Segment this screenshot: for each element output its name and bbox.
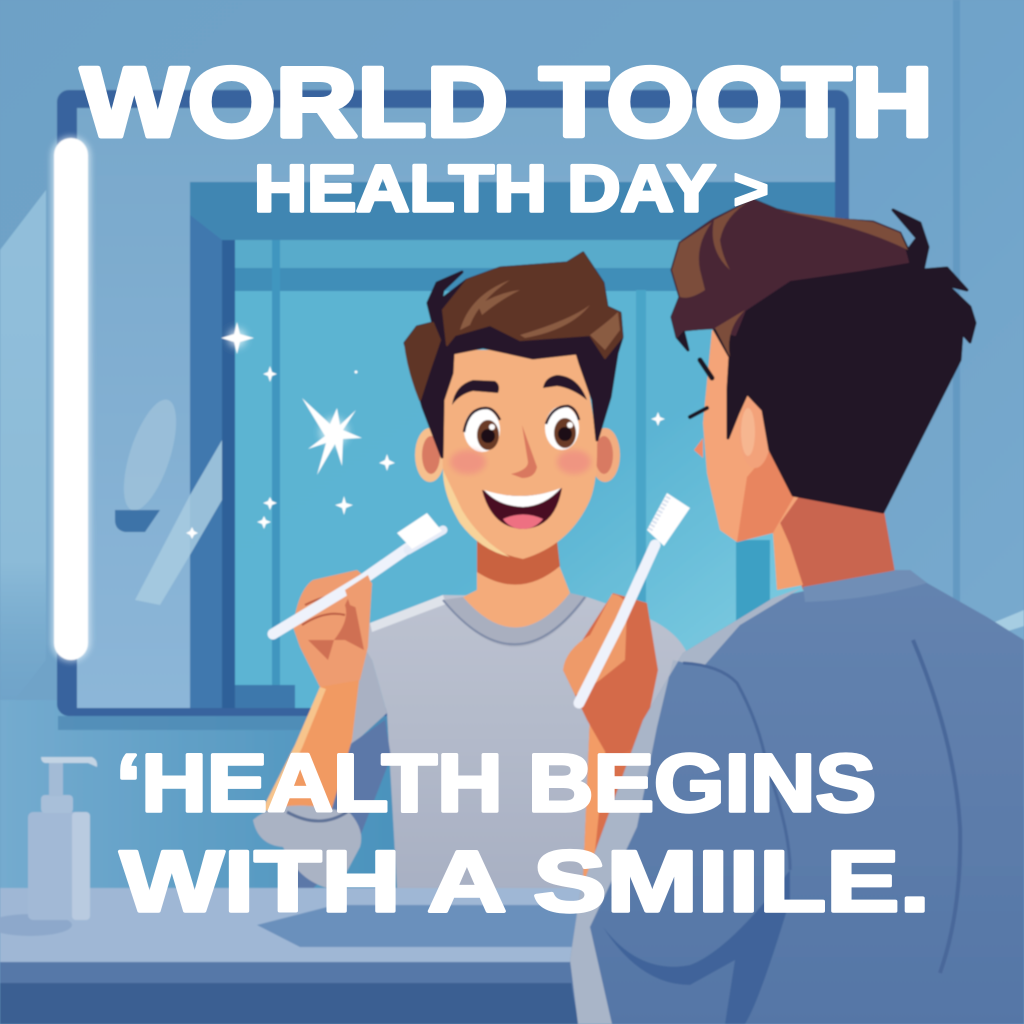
reflected room bbox=[190, 182, 835, 708]
mirror glare bbox=[113, 394, 222, 605]
mirror glass bbox=[77, 108, 835, 708]
neck bbox=[777, 490, 895, 590]
finger lines bbox=[302, 595, 345, 625]
slogan line 2: WITH A SMIILE. bbox=[120, 834, 930, 930]
shirt bbox=[570, 570, 1024, 1024]
upper sleeve bbox=[335, 640, 387, 745]
back crease bbox=[913, 640, 960, 973]
wall glare bbox=[0, 190, 46, 720]
face shadow bbox=[737, 450, 795, 542]
left brow bbox=[452, 380, 499, 405]
bathroom counter bbox=[0, 888, 640, 1024]
sleeve cuff bbox=[253, 805, 361, 890]
forearm right bbox=[583, 715, 645, 880]
slogan line 1: ‘HEALTH BEGINS bbox=[116, 738, 876, 829]
hair highlight bbox=[672, 201, 908, 357]
big sparkle bbox=[302, 398, 362, 475]
light bar bbox=[51, 136, 91, 662]
wall panel line bbox=[953, 0, 960, 640]
right cheek bbox=[557, 450, 591, 474]
tongue bbox=[503, 514, 543, 529]
face bbox=[441, 350, 597, 559]
eyebrow bbox=[700, 360, 712, 378]
sleeve seam bbox=[683, 663, 790, 870]
inner ear bbox=[741, 408, 755, 456]
nose bbox=[511, 425, 537, 478]
reflected man bbox=[253, 253, 690, 897]
ear bbox=[739, 398, 771, 468]
shoulder highlight bbox=[370, 595, 446, 632]
hair bbox=[405, 253, 622, 457]
collar bbox=[803, 570, 927, 602]
sleeve shadow bbox=[285, 720, 391, 897]
neck light strip bbox=[772, 518, 803, 590]
forearm light edge bbox=[583, 715, 606, 880]
finger over brush bbox=[345, 575, 372, 610]
left hand bbox=[293, 570, 372, 687]
wall glare right bbox=[995, 610, 1024, 632]
hand back bbox=[563, 593, 658, 760]
small sparkle glow bbox=[228, 329, 246, 347]
teeth bbox=[484, 488, 561, 507]
cheeks bbox=[450, 450, 486, 474]
subtitle: HEALTH DAY bbox=[254, 151, 716, 225]
shirt grey rim bbox=[570, 587, 803, 1024]
lower wall below mirror bbox=[0, 700, 400, 900]
mirror frame bbox=[57, 90, 849, 716]
lower arm shading bbox=[603, 870, 790, 1024]
hair highlights bbox=[460, 280, 620, 350]
cuff fold bbox=[287, 812, 347, 821]
fingers bbox=[563, 594, 627, 695]
back-view man bbox=[570, 200, 1024, 1024]
right hand in mirror bbox=[563, 493, 690, 880]
shelf bbox=[115, 510, 160, 532]
dispenser shadow bbox=[0, 914, 72, 936]
sparkles bbox=[186, 322, 665, 539]
ears bbox=[415, 428, 620, 482]
mouth bbox=[482, 488, 562, 529]
neck shadow bbox=[477, 540, 560, 585]
nose tip bbox=[694, 438, 703, 458]
right toothbrush bbox=[579, 493, 690, 703]
mirror frame shadow bbox=[58, 716, 388, 730]
subtitle: > bbox=[733, 157, 769, 222]
eyelash bbox=[690, 408, 707, 417]
face bbox=[703, 330, 800, 542]
sweater body bbox=[363, 595, 690, 890]
forearm bbox=[262, 673, 360, 815]
right brow bbox=[543, 375, 587, 400]
collar stitch bbox=[443, 597, 585, 644]
small sparkles bbox=[221, 322, 254, 354]
sweater collar bbox=[443, 593, 587, 647]
big sparkle glow bbox=[320, 418, 348, 446]
sink bbox=[257, 905, 590, 947]
title: WORLD TOOTH bbox=[81, 47, 933, 157]
hair bbox=[672, 200, 975, 512]
eyes bbox=[464, 406, 579, 452]
mirror bbox=[57, 90, 849, 730]
forearm highlight bbox=[262, 687, 326, 811]
hair top bbox=[405, 253, 622, 400]
hair top bbox=[672, 200, 908, 337]
jaw highlight bbox=[443, 470, 510, 557]
finger shadow bbox=[308, 590, 364, 660]
neck bbox=[463, 540, 570, 628]
soap dispenser bbox=[28, 757, 97, 920]
left toothbrush bbox=[273, 513, 443, 634]
